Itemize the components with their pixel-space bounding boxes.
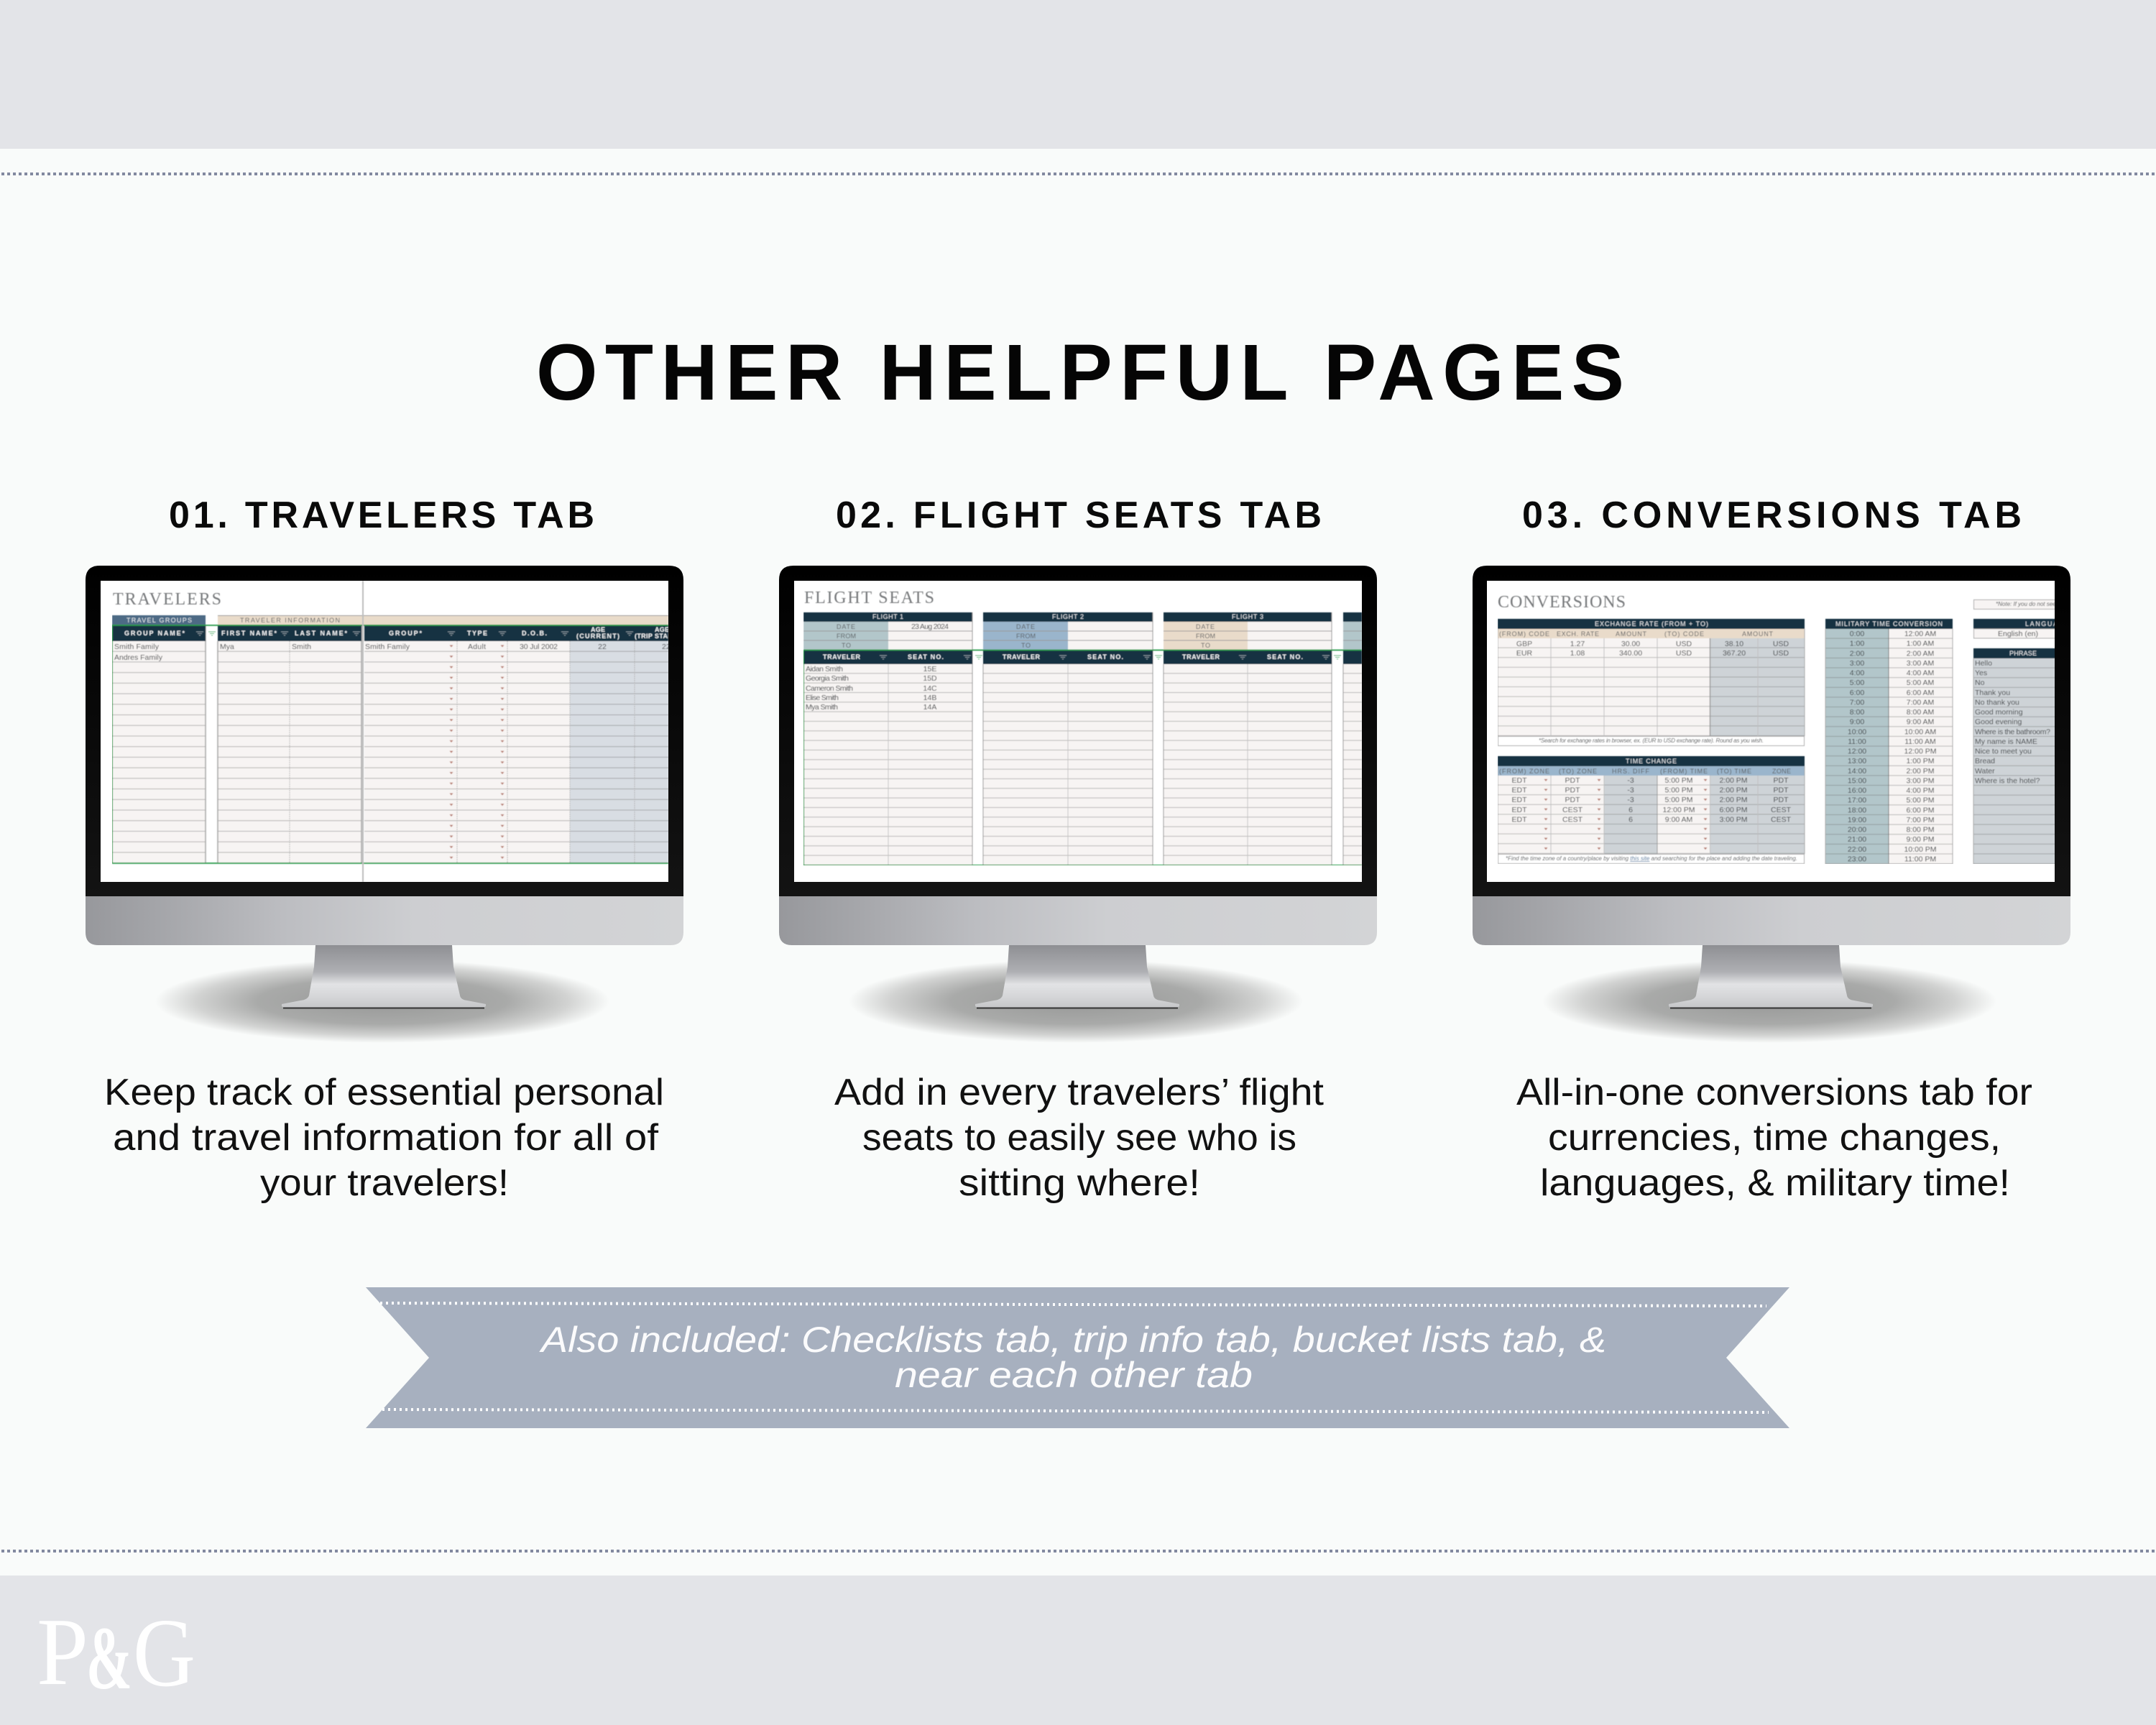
table: phrases: No thank you xyxy=(1975,699,2019,707)
table: flight 1: Cameron Smith xyxy=(806,684,853,693)
bottom band xyxy=(0,1576,2156,1725)
table: phrases: Thank you xyxy=(1975,689,2010,697)
description: flight seats: Add in every travelers’ flight xyxy=(834,1072,1325,1113)
note box: *Note: If you do not see your language xyxy=(1996,601,2094,607)
table: time change: 5:00 PM xyxy=(1664,776,1693,785)
table: flight 1: SEAT NO. xyxy=(908,653,944,661)
table: military time conversion: 10:00 PM xyxy=(1904,845,1936,854)
table: exchange rate: USD xyxy=(1676,640,1692,648)
table data: Smith xyxy=(292,643,311,651)
table: military time conversion: 20:00 xyxy=(1848,826,1866,834)
table: military time conversion: 11:00 AM xyxy=(1904,737,1936,746)
table: phrases: Bread xyxy=(1975,757,1995,765)
table: time change: PDT xyxy=(1774,776,1789,785)
table: time change: -3 xyxy=(1627,786,1634,795)
table: military time conversion: 4:00 xyxy=(1850,668,1864,677)
table: time change: -3 xyxy=(1627,796,1634,804)
table: exchange rate xyxy=(1498,619,1805,746)
table: flight 1: Aidan Smith xyxy=(806,665,843,673)
table: military time conversion: 5:00 AM xyxy=(1907,678,1934,687)
table: military time conversion: 4:00 PM xyxy=(1906,786,1935,795)
table: flight 1: Elise Smith xyxy=(806,694,839,702)
table: time change: PDT xyxy=(1774,796,1789,804)
table: military time conversion: 1:00 PM xyxy=(1906,757,1935,765)
description: conversions: languages, & military time! xyxy=(1540,1162,2010,1204)
table: military time conversion: 19:00 xyxy=(1848,816,1866,824)
table: phrases: PHRASE xyxy=(2009,650,2037,657)
description: conversions: currencies, time changes, xyxy=(1548,1117,2001,1159)
logo: G xyxy=(133,1599,195,1707)
table: exchange rate: GBP xyxy=(1516,640,1532,648)
band: travel groups: TRAVEL GROUPS xyxy=(126,617,192,624)
note box xyxy=(1973,599,2055,610)
table data: 22 xyxy=(598,643,607,651)
table: time change: EDT xyxy=(1512,776,1527,785)
table: exchange rate: AMOUNT xyxy=(1616,630,1647,638)
table: flight 2: DATE xyxy=(1016,623,1035,630)
table: military time conversion: 4:00 AM xyxy=(1907,668,1934,677)
description: travelers: Keep track of essential personal xyxy=(104,1072,664,1113)
screen: travelers spreadsheet xyxy=(112,581,679,882)
table: time change: EDT xyxy=(1512,786,1527,795)
table: flight 1: 15D xyxy=(923,674,937,683)
table: time change: (TO) ZONE xyxy=(1559,768,1597,775)
table: phrases: Hello xyxy=(1975,659,1992,668)
table: time change: EDT xyxy=(1512,796,1527,804)
table: time change: EDT xyxy=(1512,806,1527,814)
language selector xyxy=(1973,619,2070,638)
table: phrases: Nice to meet you xyxy=(1975,748,2032,756)
description: travelers: and travel information for all of xyxy=(113,1117,659,1159)
table: military time conversion: 1:00 AM xyxy=(1907,640,1934,648)
table: flight 1: Georgia Smith xyxy=(806,674,849,683)
table header row: D.O.B. xyxy=(522,630,547,637)
table: exchange rate: USD xyxy=(1773,649,1789,658)
table: time change: 12:00 PM xyxy=(1663,806,1695,814)
sheet title: CONVERSIONS xyxy=(1498,593,1626,612)
table: exchange rate: (TO) CODE xyxy=(1664,630,1704,638)
table: military time conversion: 21:00 xyxy=(1848,835,1866,844)
table header row: FIRST NAME* xyxy=(221,630,277,637)
table: time change: ZONE xyxy=(1772,768,1791,775)
table: military time conversion: 8:00 xyxy=(1850,708,1864,717)
table: time change: PDT xyxy=(1565,786,1580,795)
logo: P xyxy=(37,1598,88,1705)
table: military time conversion: 6:00 PM xyxy=(1906,806,1935,814)
table data: Andres Family xyxy=(114,653,163,662)
table: exchange rate: 30.00 xyxy=(1621,640,1640,648)
table: flight 1: 14A xyxy=(923,703,936,712)
table: military time conversion: 9:00 xyxy=(1850,718,1864,727)
table: military time conversion: 5:00 PM xyxy=(1906,796,1935,805)
description: conversions: All-in-one conversions tab for xyxy=(1516,1072,2032,1113)
table: military time conversion: 3:00 xyxy=(1850,659,1864,668)
table: phrases: Good morning xyxy=(1975,708,2023,717)
table data: Smith Family xyxy=(114,643,160,651)
table: time change: CEST xyxy=(1562,815,1583,824)
sheet title: TRAVELERS xyxy=(113,590,221,609)
table: flight 2: SEAT NO. xyxy=(1087,653,1123,661)
title: OTHER HELPFUL PAGES xyxy=(536,328,1624,417)
table: military time conversion: 1:00 xyxy=(1850,640,1864,648)
table header row: AGE xyxy=(655,626,669,633)
table: flight 3: FLIGHT 3 xyxy=(1232,613,1263,620)
table: time change: PDT xyxy=(1774,786,1789,795)
table: flight 4 (cropped) xyxy=(1343,612,1362,865)
description: travelers xyxy=(104,1072,664,1204)
table: phrases: Yes xyxy=(1975,669,1987,678)
table: military time conversion: 15:00 xyxy=(1848,776,1866,785)
table: flight 3: DATE xyxy=(1196,623,1215,630)
table: military time conversion: 9:00 AM xyxy=(1907,718,1934,727)
table data: Adult xyxy=(468,643,486,651)
table: flight 3: TRAVELER xyxy=(1182,653,1220,661)
monitor 2: flight seats xyxy=(779,566,1377,1043)
table cells xyxy=(112,625,668,863)
table: military time conversion: 11:00 xyxy=(1848,737,1866,746)
table: time change: 2:00 PM xyxy=(1719,796,1748,804)
table: military time conversion: 6:00 AM xyxy=(1907,689,1934,697)
table: time change: 2:00 PM xyxy=(1719,786,1748,795)
table header row: GROUP NAME* xyxy=(124,630,185,637)
table: time change xyxy=(1498,756,1805,864)
table: military time conversion: 2:00 xyxy=(1850,649,1864,658)
table: time change: 5:00 PM xyxy=(1664,786,1693,795)
table: exchange rate: *Search for exchange rates in browser, ex. (EUR to USD exchange rate). Round as you wish. xyxy=(1539,737,1764,744)
table: flight 1: TO xyxy=(842,642,851,649)
table: exchange rate: 340.00 xyxy=(1619,649,1642,658)
table: military time conversion: 12:00 AM xyxy=(1904,630,1936,638)
table: flight 3: SEAT NO. xyxy=(1267,653,1303,661)
table: military time conversion: 23:00 xyxy=(1848,855,1866,864)
table: exchange rate: AMOUNT xyxy=(1742,630,1774,638)
table: exchange rate: 367.20 xyxy=(1723,649,1746,658)
table: military time conversion: MILITARY TIME CONVERSION xyxy=(1835,620,1943,627)
table: exchange rate: EXCH. RATE xyxy=(1557,630,1599,638)
table: time change: *Find the time zone of a country/place by visiting this site and searching for the place and adding the date traveling. xyxy=(1506,855,1797,862)
table: phrases: Good evening xyxy=(1975,718,2022,727)
table: time change: CEST xyxy=(1771,815,1792,824)
table: flight 1: FLIGHT 1 xyxy=(872,613,903,620)
monitor 3: conversions xyxy=(1473,566,2094,1043)
table: flight 2: FLIGHT 2 xyxy=(1052,613,1084,620)
heading: travelers tab: 01. TRAVELERS TAB xyxy=(169,494,594,536)
logo: & xyxy=(86,1609,132,1708)
ribbon banner xyxy=(366,1287,1789,1428)
table: time change: HRS. DIFF xyxy=(1612,768,1650,775)
table: military time conversion: 12:00 xyxy=(1848,748,1866,756)
table: military time conversion: 3:00 PM xyxy=(1906,776,1935,785)
table: phrases: My name is NAME xyxy=(1975,737,2037,746)
table: military time conversion: 10:00 AM xyxy=(1904,727,1936,736)
table header row: AGE xyxy=(591,626,605,633)
table: exchange rate: (FROM) CODE xyxy=(1499,630,1549,638)
table: exchange rate: USD xyxy=(1676,649,1692,658)
table: military time conversion: 8:00 AM xyxy=(1907,708,1934,717)
monitor 1: travelers xyxy=(86,566,683,1043)
table header row: (CURRENT) xyxy=(576,632,619,640)
table data: Smith Family xyxy=(365,643,410,651)
description: conversions xyxy=(1516,1072,2032,1204)
table: military time conversion: 10:00 xyxy=(1848,727,1866,736)
table: flight 1: DATE xyxy=(837,623,855,630)
table: military time conversion: 7:00 xyxy=(1850,698,1864,707)
table: flight 3: TO xyxy=(1201,642,1210,649)
table: flight 3 xyxy=(1164,612,1341,865)
table: military time conversion: 11:00 PM xyxy=(1904,855,1936,864)
description: flight seats: sitting where! xyxy=(959,1162,1200,1204)
top band xyxy=(0,0,2156,149)
table: military time conversion: 7:00 AM xyxy=(1907,698,1934,707)
table header row: GROUP* xyxy=(389,630,422,637)
table: military time conversion: 16:00 xyxy=(1848,786,1866,795)
table: phrases xyxy=(1973,648,2055,864)
table: flight 1: Mya Smith xyxy=(806,703,838,712)
table: time change: 6 xyxy=(1628,806,1633,814)
table: time change: CEST xyxy=(1771,806,1792,814)
table: military time conversion: 6:00 xyxy=(1850,689,1864,697)
banner text: Also included: Checklists tab, trip info tab, bucket lists tab, & xyxy=(539,1320,1606,1360)
heading: flight seats tab: 02. FLIGHT SEATS TAB xyxy=(836,494,1322,536)
table: time change: PDT xyxy=(1565,776,1580,785)
screen: conversions spreadsheet xyxy=(1498,593,2094,864)
table: exchange rate: EUR xyxy=(1516,649,1533,658)
table: military time conversion: 3:00 AM xyxy=(1907,659,1934,668)
table: time change: CEST xyxy=(1562,806,1583,814)
description: travelers: your travelers! xyxy=(260,1162,509,1204)
table: exchange rate: 38.10 xyxy=(1725,640,1743,648)
table data: 30 Jul 2002 xyxy=(520,643,558,651)
banner text xyxy=(539,1320,1606,1395)
table: flight 1: 23 Aug 2024 xyxy=(911,622,949,631)
table: military time conversion: 14:00 xyxy=(1848,767,1866,776)
table: exchange rate: 1.27 xyxy=(1570,640,1585,648)
language selector: LANGUAGE xyxy=(2025,620,2070,627)
table: military time conversion: 0:00 xyxy=(1850,630,1864,638)
table: time change: TIME CHANGE xyxy=(1626,758,1677,765)
table: time change: (FROM) ZONE xyxy=(1499,768,1549,775)
description: flight seats xyxy=(834,1072,1325,1204)
table: phrases: Where is the hotel? xyxy=(1975,776,2040,785)
table: flight 2: FROM xyxy=(1016,632,1036,640)
table: flight 3: FROM xyxy=(1196,632,1215,640)
table: military time conversion: 7:00 PM xyxy=(1906,816,1935,824)
table: time change: 3:00 PM xyxy=(1719,815,1748,824)
table: time change: 9:00 AM xyxy=(1665,815,1692,824)
table: time change: EDT xyxy=(1512,815,1527,824)
table: flight 2: TRAVELER xyxy=(1003,653,1041,661)
table: exchange rate: EXCHANGE RATE (FROM + TO) xyxy=(1595,620,1708,627)
table: military time conversion: 8:00 PM xyxy=(1906,826,1935,834)
table: exchange rate: USD xyxy=(1773,640,1789,648)
sheet title: FLIGHT SEATS xyxy=(804,589,934,607)
table: military time conversion: 12:00 PM xyxy=(1904,748,1936,756)
table: flight 2: TO xyxy=(1021,642,1031,649)
banner text: near each other tab xyxy=(895,1355,1253,1395)
table: military time conversion: 22:00 xyxy=(1848,845,1866,854)
table: flight 1: TRAVELER xyxy=(823,653,861,661)
table: flight 2 xyxy=(983,612,1162,865)
table: flight 1 xyxy=(803,612,982,865)
table: military time conversion: 2:00 PM xyxy=(1906,767,1935,776)
table: time change: (FROM) TIME xyxy=(1660,768,1708,775)
logo xyxy=(37,1598,195,1708)
screen: flight seats spreadsheet xyxy=(803,589,1362,865)
table data: Mya xyxy=(220,643,234,651)
table: military time conversion: 9:00 PM xyxy=(1906,835,1935,844)
heading: conversions tab: 03. CONVERSIONS TAB xyxy=(1522,494,2022,536)
table: phrases: Where is the bathroom? xyxy=(1975,727,2050,736)
table: flight 1: 14B xyxy=(923,694,936,702)
table data xyxy=(114,643,671,662)
table: military time conversion: 18:00 xyxy=(1848,806,1866,814)
table: time change: -3 xyxy=(1627,776,1634,785)
band: travel groups xyxy=(112,615,206,625)
table header row: TYPE xyxy=(467,630,487,637)
table header row xyxy=(112,625,679,641)
table: phrases: No xyxy=(1975,678,1985,687)
table: time change: 5:00 PM xyxy=(1664,796,1693,804)
table header row: LAST NAME* xyxy=(295,630,347,637)
table: time change: 6 xyxy=(1628,815,1633,824)
table: military time conversion: 17:00 xyxy=(1848,796,1866,805)
table: time change: 2:00 PM xyxy=(1719,776,1748,785)
table: flight 1: FROM xyxy=(837,632,856,640)
table: flight 1: 15E xyxy=(923,665,936,673)
table: military time conversion: 13:00 xyxy=(1848,757,1866,765)
table: military time conversion: 5:00 xyxy=(1850,678,1864,687)
table: time change: (TO) TIME xyxy=(1717,768,1751,775)
table: time change: 6:00 PM xyxy=(1719,806,1748,814)
table: phrases: Water xyxy=(1975,767,1995,776)
table: military time conversion: 2:00 AM xyxy=(1907,649,1934,658)
band: traveler information: TRAVELER INFORMATION xyxy=(240,617,340,624)
table: military time conversion xyxy=(1825,619,1953,864)
band: traveler information xyxy=(218,615,668,625)
description: flight seats: seats to easily see who is xyxy=(862,1117,1296,1159)
table data: 22 xyxy=(662,643,671,651)
table: exchange rate: 1.08 xyxy=(1570,649,1585,658)
table header row: (TRIP START) xyxy=(635,632,679,640)
table: flight 1: 14C xyxy=(923,684,937,693)
table: time change: PDT xyxy=(1565,796,1580,804)
language selector: English (en) xyxy=(1998,630,2038,638)
